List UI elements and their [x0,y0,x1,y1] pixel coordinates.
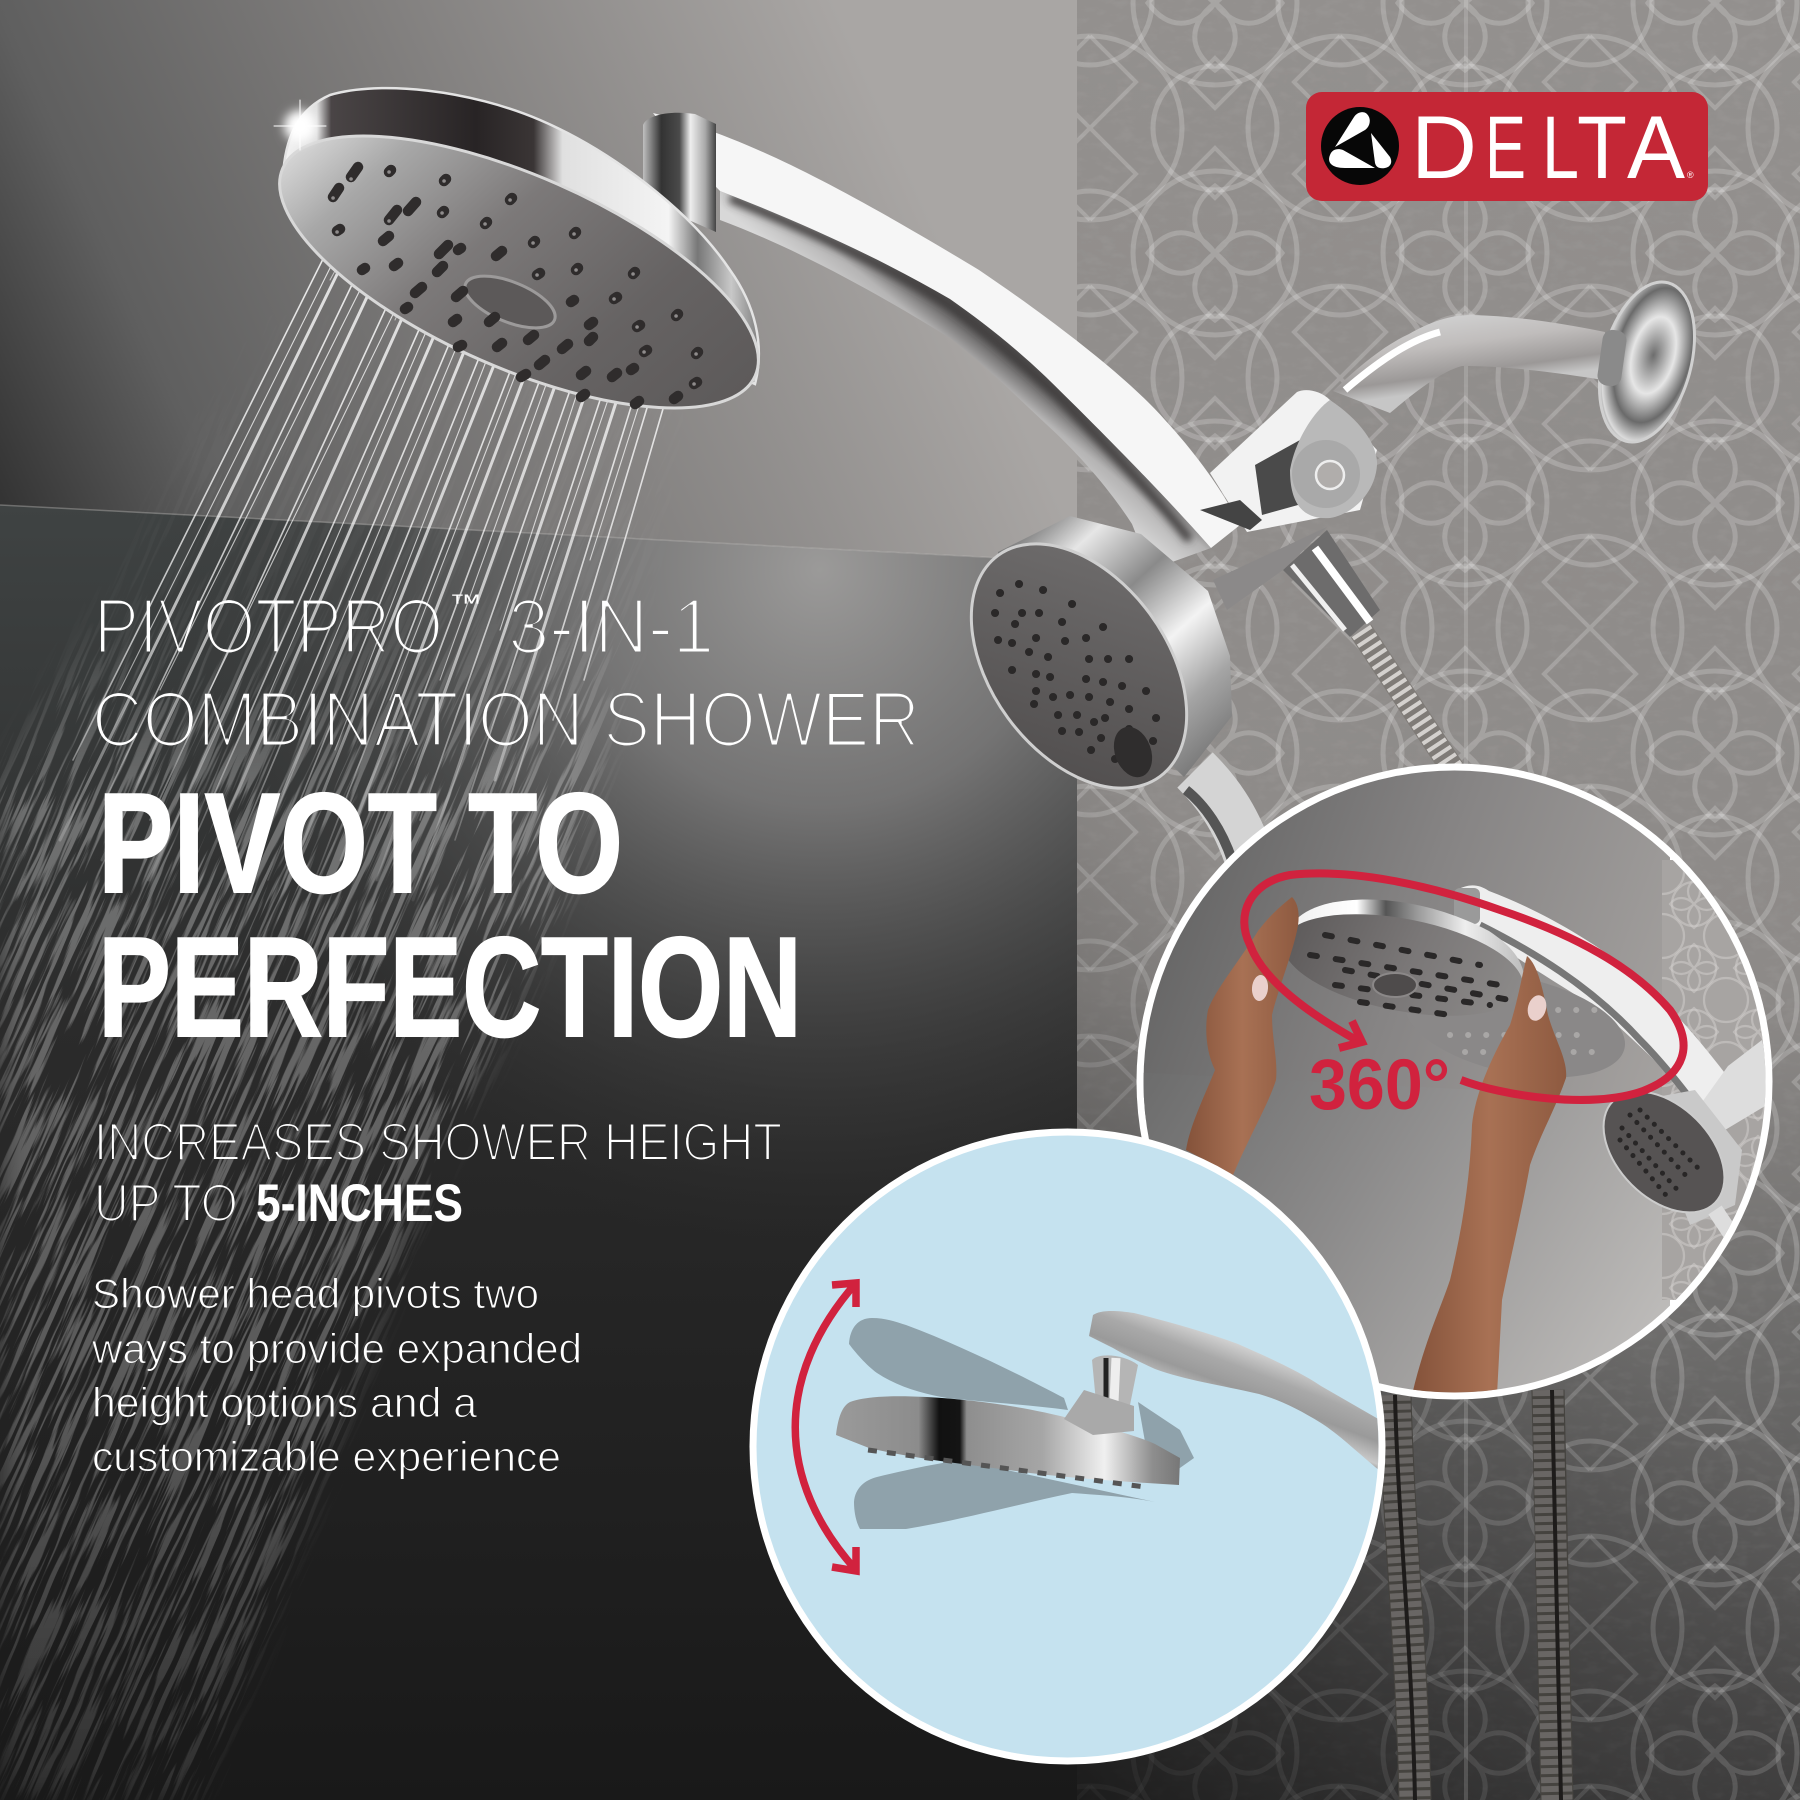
inset background [1130,760,1670,1120]
product name: ™ [449,590,482,617]
hand shower face [927,503,1231,829]
background: lower wall and ledge [0,505,1077,1800]
description: height options and a [92,1379,478,1426]
inset circle: 360 degree rotation [1130,760,1782,1410]
subheading: 5-INCHES [256,1174,463,1233]
wordmark: T [1577,97,1627,197]
head face [244,80,794,464]
hand shower body [998,516,1232,777]
pivot neck [1092,1355,1138,1405]
wall arm and escutcheon [1333,271,1711,453]
rim of held shower head [1298,900,1524,978]
inset circle: up and down pivot [750,1128,1386,1764]
360 rotation arrow [1244,873,1684,1100]
background: patterned tile wall [1077,0,1800,1800]
Delta logo [1306,92,1708,201]
ghost shower head [1486,982,1625,1077]
lower hoses [1395,1390,1561,1800]
product name: COMBINATION SHOWER [92,675,920,763]
subheading: UP TO [94,1174,238,1233]
wordmark: D [1411,97,1477,197]
arm underside [720,191,1211,570]
wordmark: L [1542,97,1579,197]
product name: 3-IN-1 [508,582,714,670]
hand shower handle [1195,770,1250,860]
face of held shower head [1289,914,1522,1016]
description: ways to provide expanded [91,1325,582,1372]
pivot ball joint [1064,1390,1134,1435]
pivot arm [1089,1311,1385,1475]
headline: PERFECTION [98,908,802,1067]
spray nozzles [333,167,698,404]
water streams from the shower head [60,172,696,930]
description: customizable experience [92,1433,561,1480]
wordmark: E [1485,97,1526,197]
disc nozzles [868,1450,1145,1487]
arm top face [653,113,1240,548]
pivot arrow [795,1283,856,1571]
right hand and forearm [1412,956,1566,1395]
inset arm [1461,885,1724,1100]
description: Shower head pivots two [92,1270,539,1317]
logo mark [1321,107,1399,185]
hose upper section [1361,631,1460,780]
subheading: INCREASES SHOWER HEIGHT [94,1113,782,1172]
ghost head tilted up [849,1318,1068,1410]
wordmark: ® [1687,170,1694,180]
small mount and hand shower [1704,1040,1766,1130]
head rim [283,88,759,384]
centre swirl [458,265,562,339]
wordmark: A [1627,97,1686,197]
headline: PIVOT TO [98,764,623,923]
left hand and forearm [1186,897,1299,1175]
subheading [94,1113,782,1233]
product name: PIVOTPRO [94,582,443,670]
360 degree label: 360° [1309,1046,1450,1125]
water spray texture [0,620,616,1800]
main disc [836,1396,1180,1485]
main rain shower head [244,80,794,464]
headline [98,764,802,1067]
ghost back piece [1138,1402,1194,1475]
background: upper wall [0,0,1077,570]
ghost head tilted down [854,1460,1155,1529]
swivel clamp [1200,390,1377,610]
wordmark [1411,97,1694,197]
hand shower [927,503,1250,860]
hand shower nozzles [995,584,1156,759]
product name [92,582,920,763]
main shower arm [643,113,1240,570]
swivel neck [643,113,716,232]
sparkle highlight [274,100,326,150]
description [91,1270,582,1480]
hand shower holder cone [1283,530,1380,637]
